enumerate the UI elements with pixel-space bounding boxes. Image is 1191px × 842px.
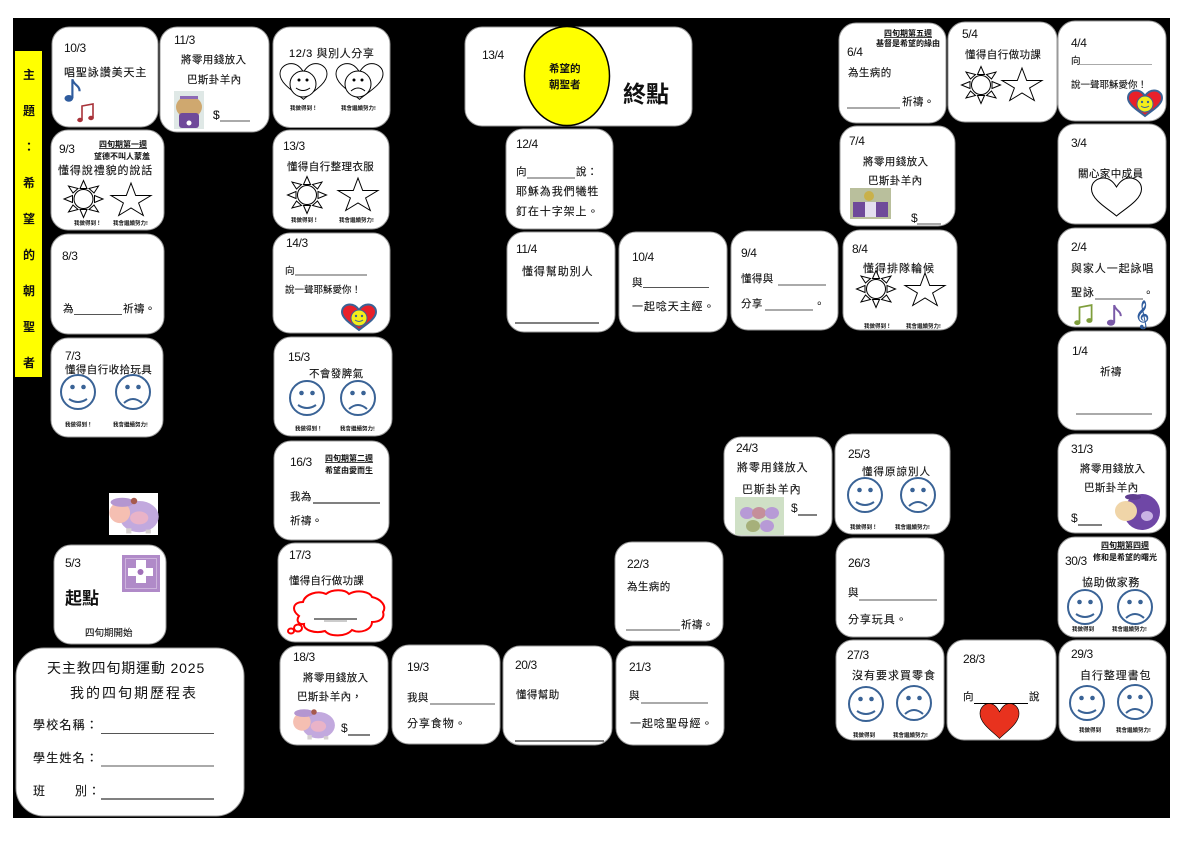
card: 20/3: 懂得幫助 <box>516 688 560 701</box>
card: 17/3: 17/3 <box>289 548 311 562</box>
card: 14/3: 向 <box>285 265 295 277</box>
card: 24/3 <box>724 437 832 536</box>
card: 21/3: 與 <box>629 690 640 702</box>
card: 21/3 <box>616 646 724 745</box>
card: 2/4: 2/4 <box>1071 240 1087 254</box>
icon: sun <box>64 180 103 218</box>
card: 6/4: 6/4 <box>847 45 863 59</box>
card: 18/3: 將零用錢放入 <box>303 671 368 684</box>
card: 26/3: 分享玩具。 <box>848 612 908 626</box>
card: 16/3: 希望由愛而生 <box>325 465 373 475</box>
card: 24/3: $ <box>791 501 798 515</box>
yellow oval: 朝聖者 <box>549 78 580 91</box>
card: 24/3: 24/3 <box>736 441 758 455</box>
card: 10/4: 與 <box>632 277 643 289</box>
card: 17/3 <box>278 543 392 642</box>
icon: smile <box>1070 686 1104 720</box>
card: 7/3: 懂得自行收拾玩具 <box>65 363 152 376</box>
card: 8/3: 8/3 <box>62 249 78 263</box>
card: 14/3 <box>273 233 390 333</box>
card: 6/4 <box>839 23 946 123</box>
icon: sun <box>856 270 896 308</box>
card: 11/4 <box>507 232 615 332</box>
card: 5/3 start: 起點 <box>65 589 99 608</box>
theme banner: 題 <box>23 104 35 118</box>
card: 25/3: 懂得原諒別人 <box>862 465 931 478</box>
card: 4/4: 向 <box>1071 55 1081 67</box>
card: 27/3: 我做得到 <box>853 731 876 739</box>
card: 10/3: 10/3 <box>64 41 86 55</box>
card: 15/3: 15/3 <box>288 350 310 364</box>
card: 19/3: 分享食物。 <box>407 716 466 730</box>
theme banner: 希 <box>23 175 35 190</box>
icon: smile <box>61 375 95 409</box>
card: 9/4: 。 <box>814 298 825 310</box>
card: 10/4: 一起唸天主經。 <box>632 299 715 313</box>
card: 9/4 <box>731 231 838 330</box>
icon: frown <box>116 375 150 409</box>
card: 6/4: 基督是希望的緣由 <box>876 38 940 48</box>
title panel: ： <box>88 784 100 798</box>
card: 29/3: 我會繼續努力! <box>1116 726 1151 734</box>
card: 8/3: 祈禱。 <box>123 302 156 315</box>
card: 10/3 <box>52 27 158 127</box>
card: 9/3 <box>51 130 164 230</box>
card: 2/4: 與家人一起詠唱 <box>1071 261 1154 275</box>
icon: star <box>905 273 945 306</box>
card: 22/3: 為生病的 <box>627 580 671 593</box>
card: 9/4: 懂得與 <box>741 273 774 285</box>
icon: blue note <box>64 79 80 102</box>
card: 9/3: 我會繼續努力! <box>113 219 148 227</box>
card: 28/3: 向 <box>963 690 974 703</box>
card: 26/3: 26/3 <box>848 556 870 570</box>
card: 3/4: 關心家中成員 <box>1078 167 1143 180</box>
icon: heart with smile <box>342 304 376 330</box>
card: 2/4: 聖詠 <box>1071 285 1095 299</box>
card: 12/4: 12/4 <box>516 137 538 151</box>
title panel: 學生姓名： <box>33 750 99 765</box>
card: 27/3: 27/3 <box>847 648 869 662</box>
card: 11/3: $ <box>213 108 220 122</box>
icon: heart frown <box>336 64 383 99</box>
card: 25/3 <box>835 434 950 534</box>
icon: star <box>338 178 378 210</box>
theme banner: 朝 <box>23 283 35 298</box>
card: 10/3: 唱聖詠讚美天主 <box>64 65 147 79</box>
card: 22/3: 22/3 <box>627 557 649 571</box>
card: 12/4: 釘在十字架上。 <box>516 204 599 218</box>
card: 5/3 start: 四旬期開始 <box>85 627 133 639</box>
card: 16/3 <box>274 441 389 540</box>
image: purple lamb <box>1115 494 1160 530</box>
card: 8/3: 為 <box>63 302 74 315</box>
card: 6/4: 祈禱。 <box>902 95 935 108</box>
card: 8/4 <box>843 230 957 330</box>
card: 30/3: 修和是希望的曙光 <box>1093 552 1157 562</box>
theme banner: 者 <box>23 355 35 370</box>
card: 10/4: 10/4 <box>632 250 654 264</box>
card: 13/3: 我會繼續努力! <box>339 216 374 224</box>
card: 15/3: 我做得到！ <box>295 424 323 432</box>
card: 4/4: 說一聲耶穌愛你！ <box>1071 79 1147 91</box>
card: 12/3: 我會繼續努力! <box>341 104 376 112</box>
card: 18/3: $ <box>341 721 348 735</box>
card: 30/3: 30/3 <box>1065 554 1087 568</box>
card: 12/4: 向 <box>516 165 527 178</box>
theme banner: 的 <box>23 247 35 262</box>
card: 27/3: 沒有要求買零食 <box>852 668 936 682</box>
card: 13/4 finish: 13/4 <box>482 48 504 62</box>
title panel: 班 <box>33 784 45 798</box>
card: 16/3: 四旬期第二週 <box>325 453 373 463</box>
icon: red heart <box>980 704 1019 738</box>
card: 5/3 start <box>54 545 166 644</box>
image: lamb <box>293 709 335 740</box>
card: 28/3 <box>947 640 1056 740</box>
card: 16/3: 祈禱。 <box>290 514 323 527</box>
icon: purple cross <box>122 555 160 592</box>
icon: green notes <box>1074 305 1092 325</box>
icon: frown <box>1118 685 1152 719</box>
card: 18/3 <box>280 646 388 745</box>
icon: red notes <box>77 104 94 122</box>
card: 12/4: 說： <box>576 166 598 178</box>
card: 8/4: 我做得到！ <box>864 322 892 330</box>
card: 9/3: 懂得說禮貌的說話 <box>58 163 153 177</box>
card: 11/3 <box>160 27 269 132</box>
theme banner: 聖 <box>23 320 35 334</box>
card: 7/3 <box>51 338 163 437</box>
card: 26/3: 與 <box>848 587 859 599</box>
icon: sun <box>288 176 326 214</box>
card: 31/3 <box>1058 434 1166 533</box>
card: 28/3: 28/3 <box>963 652 985 666</box>
card: 7/3: 7/3 <box>65 349 81 363</box>
card: 19/3: 19/3 <box>407 660 429 674</box>
card: 5/4: 懂得自行做功課 <box>965 48 1041 61</box>
icon: star <box>1002 68 1042 100</box>
icon: frown <box>1118 590 1152 624</box>
card: 12/3: 我做得到！ <box>290 104 318 112</box>
card: 7/4: $ <box>911 211 918 225</box>
yellow oval: 希望的 <box>549 62 580 75</box>
card: 7/4: 巴斯卦羊內 <box>868 174 922 187</box>
image: lambs photo <box>735 497 784 535</box>
card: 20/3 <box>503 646 612 745</box>
card: 9/3: 我做得到！ <box>74 219 102 227</box>
card: 12/3: 12/3 與別人分享 <box>289 46 374 60</box>
card: 30/3 <box>1058 537 1166 637</box>
card: 13/3 <box>273 130 389 229</box>
icon: star <box>111 183 151 216</box>
card: 18/3: 18/3 <box>293 650 315 664</box>
card: 19/3 <box>392 645 500 744</box>
theme banner: 主 <box>23 67 35 82</box>
card: 3/4 <box>1058 124 1166 224</box>
card: 9/3: 四旬期第一週 <box>99 139 147 149</box>
card: 22/3: 祈禱。 <box>681 618 714 631</box>
icon: sun <box>962 66 1000 104</box>
card: 8/4: 我會繼續努力! <box>906 322 941 330</box>
card: 26/3 <box>836 538 944 637</box>
card: 9/4: 9/4 <box>741 246 757 260</box>
card: 21/3: 一起唸聖母經。 <box>630 716 713 730</box>
card: 14/3: 14/3 <box>286 236 308 250</box>
card: 14/3: 說一聲耶穌愛你！ <box>285 284 361 296</box>
card: 21/3: 21/3 <box>629 660 651 674</box>
title panel: 學校名稱： <box>33 717 99 732</box>
card: 9/3: 望德不叫人蒙羞 <box>94 151 150 161</box>
icon: heart smile <box>280 64 327 99</box>
card: 8/4: 8/4 <box>852 242 868 256</box>
card: 10/4 <box>619 232 727 332</box>
card: 31/3: 31/3 <box>1071 442 1093 456</box>
icon: smile <box>848 478 882 512</box>
card: 7/4: 7/4 <box>849 134 865 148</box>
card: 3/4: 3/4 <box>1071 136 1087 150</box>
card: 9/4: 分享 <box>741 297 763 310</box>
image: lamb beside start <box>109 493 159 535</box>
card: 9/3: 9/3 <box>59 142 75 156</box>
card: 22/3 <box>615 542 723 641</box>
card: 15/3: 我會繼續努力! <box>340 424 375 432</box>
icon: heart with smile <box>1128 90 1162 116</box>
icon: smile <box>290 381 324 415</box>
card: 7/3: 我會繼續努力! <box>113 420 148 428</box>
card: 27/3: 我會繼續努力! <box>893 731 928 739</box>
card: 1/4: 祈禱 <box>1100 365 1122 378</box>
card: 27/3 <box>836 640 944 740</box>
card: 24/3: 將零用錢放入 <box>737 460 808 474</box>
card: 7/4: 將零用錢放入 <box>863 155 928 168</box>
card: 29/3: 29/3 <box>1071 647 1093 661</box>
card: 6/4: 四旬期第五週 <box>884 28 932 38</box>
title: 天主教四旬期運動 2025 <box>47 660 205 676</box>
title panel: 別 <box>75 784 87 798</box>
card: 2/4: 。 <box>1143 287 1154 299</box>
card: 30/3: 四旬期第四週 <box>1101 540 1149 550</box>
card: 13/3: 我做得到！ <box>291 216 319 224</box>
card: 11/3: 巴斯卦羊內 <box>187 73 242 86</box>
card: 5/3 start: 5/3 <box>65 556 81 570</box>
card: 19/3: 我與 <box>407 692 429 704</box>
card: 11/3: 將零用錢放入 <box>181 53 246 66</box>
card: 30/3: 我做得到 <box>1072 625 1095 633</box>
card: 16/3: 我為 <box>290 490 312 503</box>
card: 25/3: 我做得到！ <box>850 523 878 531</box>
icon: purple note <box>1107 305 1121 326</box>
theme banner: 望 <box>23 211 35 226</box>
card: 31/3: 將零用錢放入 <box>1080 462 1145 475</box>
card: 29/3 <box>1059 640 1166 741</box>
icon: frown <box>901 478 935 512</box>
theme banner: ： <box>23 140 35 154</box>
icon: frown <box>897 686 931 720</box>
card: 13/4 finish <box>465 26 692 126</box>
card: 2/4 <box>1058 228 1166 329</box>
card: 7/4 <box>840 126 955 226</box>
card: 24/3: 巴斯卦羊內 <box>742 482 802 496</box>
card: 15/3 <box>274 337 392 436</box>
card: 1/4: 1/4 <box>1072 344 1088 358</box>
icon: smile <box>849 687 883 721</box>
title panel <box>16 648 244 816</box>
card: 4/4 <box>1058 21 1166 121</box>
card: 8/4: 懂得排隊輪候 <box>863 261 935 275</box>
card: 16/3: 16/3 <box>290 455 312 469</box>
card: 25/3: 25/3 <box>848 447 870 461</box>
icon: blue clef: 𝄞 <box>1135 300 1149 329</box>
card: 20/3: 20/3 <box>515 658 537 672</box>
card: 13/3: 懂得自行整理衣服 <box>287 160 374 173</box>
card: 30/3: 協助做家務 <box>1082 575 1140 589</box>
card: 4/4: 4/4 <box>1071 36 1087 50</box>
card: 28/3: 說 <box>1029 691 1040 703</box>
card: 5/4 <box>948 22 1057 122</box>
card: 17/3: 懂得自行做功課 <box>289 574 364 587</box>
card: 11/3: 11/3 <box>174 33 196 47</box>
icon: frown <box>341 381 375 415</box>
card: 31/3: 巴斯卦羊內 <box>1084 481 1138 494</box>
card: 18/3: 巴斯卦羊內， <box>297 690 362 703</box>
card: 29/3: 我做得到 <box>1079 726 1102 734</box>
card: 13/3: 13/3 <box>283 139 305 153</box>
card: 12/3 <box>273 27 390 128</box>
card: 11/4: 懂得幫助別人 <box>522 264 593 278</box>
card: 12/4 <box>506 129 613 229</box>
card: 13/4 finish: 終點 <box>623 81 669 107</box>
card: 8/3 <box>51 234 164 334</box>
icon: red thought cloud <box>288 590 384 635</box>
icon: heart outline <box>1092 178 1142 216</box>
icon: smile <box>1068 590 1102 624</box>
image: coin boxes photo <box>850 188 891 219</box>
card: 5/4: 5/4 <box>962 27 978 41</box>
card: 25/3: 我會繼續努力! <box>895 523 930 531</box>
yellow oval <box>524 26 610 126</box>
card: 6/4: 為生病的 <box>848 66 892 79</box>
card: 31/3: $ <box>1071 511 1078 525</box>
card: 29/3: 自行整理書包 <box>1080 668 1151 682</box>
subtitle: 我的四旬期歷程表 <box>70 685 198 701</box>
theme banner <box>15 51 42 377</box>
card: 15/3: 不會發脾氣 <box>309 367 364 380</box>
card: 1/4 <box>1058 331 1166 430</box>
card: 7/3: 我做得到！ <box>65 420 93 428</box>
image: sheep coin box <box>174 91 204 129</box>
card: 12/4: 耶穌為我們犧牲 <box>516 184 599 198</box>
card: 11/4: 11/4 <box>516 242 538 256</box>
card: 30/3: 我會繼續努力! <box>1112 625 1147 633</box>
